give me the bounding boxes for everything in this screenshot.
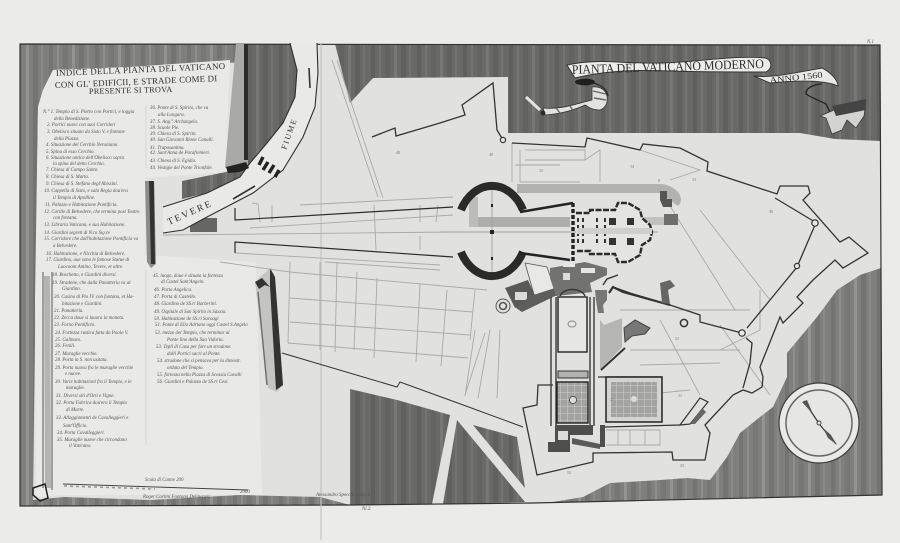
bridge piers (259, 157, 279, 177)
index list column 2 upper: 37. S. Ang.° Archangelo. (150, 120, 198, 125)
river Tiber (163, 43, 318, 233)
index paper (35, 60, 262, 497)
ribbon year (754, 68, 838, 86)
arrow mark (603, 275, 618, 285)
index list column 1: la spina del detto Cerchio. (53, 162, 105, 167)
index list column 1: il Vaticano. (69, 444, 91, 449)
south palace buildings (548, 398, 708, 452)
index list column 2 lower: 47. Porta di Castello. (154, 295, 196, 300)
index list column 2 upper: 43. Chiesa di S. Egidio. (150, 159, 196, 164)
index list column 1: 35. Muraglie nuove che circondano (57, 438, 127, 443)
index list column 2 lower: 45. luogo, doue è situata la fortezza (153, 274, 224, 279)
connecting wing (516, 283, 590, 312)
index list column 1: 13. Libraria Vaticana, e sua Habitazione. (44, 223, 125, 228)
index list column 1: 33. Alloggiamenti de Cavalleggieri e (56, 416, 129, 421)
plan reference numbers: 8 (658, 178, 660, 183)
corridors grey bands (469, 184, 681, 227)
St Peter's Basilica plan (573, 203, 652, 262)
plan reference numbers (396, 150, 773, 475)
scale bar: 2000 (240, 490, 250, 495)
index list column 2 upper: 36. Ponte di S. Spirito, che va (150, 106, 209, 111)
St Peter's ribbon title (526, 56, 866, 134)
index list column 2 upper: 41. Trapasantina. (150, 146, 185, 151)
index list column 1: 5. Spina di esso Cerchio. (46, 150, 95, 155)
ribbon tail left (526, 79, 608, 115)
plan reference numbers: 31 (675, 336, 679, 341)
index list column 1: 6. Situazione antica dell'Obelisco sopra (46, 156, 125, 161)
index list column 1: 12. Cortile di Belvedere, che termina post Teatro (44, 210, 140, 215)
hatched background: beside the river (182, 44, 297, 199)
Vatican palace buildings (505, 262, 675, 313)
signature: Alessandro Specchi sculpsit (315, 493, 371, 498)
ribbon tail right (806, 84, 866, 134)
index list column 1: della Benedizione. (54, 117, 90, 122)
index list column 1: 8. Chiesa di S. Marta. (46, 175, 89, 180)
index list column 1: 24. Fortezza rustica fatta da Paolo V. (55, 331, 129, 336)
north block (550, 262, 607, 296)
index list column 1: 23. Forno Pontificio. (54, 323, 95, 328)
index list column 2 upper: 39. Chiesa di S. Spirito. (150, 132, 197, 137)
index list column 1: 14. Giardini segreti di N.ro Sig.re (44, 231, 111, 236)
index title: INDICE DELLA PIANTA DEL VATICANO (56, 61, 226, 78)
index list column 1: Laocoont Antino, Tevere, et altre. (57, 265, 123, 270)
index list column 1: 34. Porta Cavalleggieri. (57, 431, 105, 436)
plan reference numbers: 35 (539, 168, 543, 173)
index list column 1: di Marte. (66, 408, 84, 413)
index list column 1: 18. Boschetto, e Giardini diversi. (52, 273, 117, 278)
index list column 1: 22. Zecca doue si lauora la moneta. (54, 316, 124, 321)
index list column 2 upper: 40. San Giovanni Rione Canalli. (150, 138, 214, 143)
index list column 1: 21. Panatteria. (54, 309, 83, 314)
current arrows (233, 68, 310, 199)
Castel ring (496, 299, 510, 313)
corner towers (500, 137, 818, 336)
plan reference numbers: 55 (680, 463, 684, 468)
west block (505, 280, 537, 308)
index column divider (145, 105, 147, 445)
index list column 1: 15. Corridore che dall'habitazione Pontificia va (44, 237, 139, 242)
triangular court (525, 263, 555, 298)
Belvedere court (551, 289, 594, 426)
index list column 2 upper (150, 106, 214, 171)
index list column 2 lower: 46. Porta Angelica. (154, 288, 192, 293)
index list column 2 lower: 51. Ponte di Elio Adriano oggi Castel S.Angelo (155, 323, 248, 328)
obelisk scroll lower (255, 268, 283, 392)
main ribbon (567, 57, 771, 78)
plan reference numbers: 49 (769, 209, 773, 214)
compass (779, 383, 859, 463)
index list column 1: e nuove. (65, 372, 81, 377)
index list column 2 lower: 52. mezzo del Tempio, che terminar al (155, 331, 230, 336)
outer bastions upper (282, 83, 868, 475)
index list column 1: 17. Giardino, oue sono le famose Statue di (46, 258, 130, 263)
index list column 1: il Tempio di Apolline. (53, 196, 95, 201)
plan reference numbers: 17 (610, 397, 615, 402)
plan reference numbers: 55 (567, 470, 571, 475)
index title: CON GL' EDIFICII, E STRADE COME DI (55, 73, 218, 90)
index list column 1: muraglie. (66, 386, 85, 391)
index list column 1: 27. Muraglie vecchie. (55, 352, 98, 357)
plan reference numbers: 31 (678, 393, 682, 398)
corridors of the square (520, 203, 573, 260)
index list column 1 (42, 110, 140, 449)
plan reference numbers: 34 (630, 164, 634, 169)
index left roll (33, 272, 52, 501)
ribbon year: ANNO 1560 (769, 70, 823, 85)
index list column 1: 29. Porta nuova fra le muraglie vecchie (55, 366, 134, 371)
index list column 1: 30. Varie habitazioni fra il Tempio, e le (55, 380, 132, 385)
page note top: N.1 (866, 40, 874, 45)
index list column 1: a Belvedere. (53, 244, 77, 249)
index list column 2 lower: 56. Giardini e Palazzo de SS.ri Cesi. (157, 380, 229, 385)
engraver credit: Roger Carlini Fontana Delineavit (142, 495, 210, 500)
index list column 1: con fontana. (53, 216, 77, 221)
index list column 1: 25. Galinaro. (55, 338, 81, 343)
index list column 1: 19. Stradone, che dalla Panatteria va al (52, 281, 131, 286)
index list column 2 lower: 53. Tepli di Casa per fare un stradone. (156, 345, 232, 350)
index list column 2 lower: ordata del Tempio. (167, 366, 204, 371)
index list column 1: 20. Casino di Pio IV. con fontana, et Ha- (54, 295, 134, 300)
index list column 1: bitazione e Giardini. (62, 302, 102, 307)
Belvedere garden south (598, 377, 662, 422)
index list column 1: 2. Portici nuovi con suoi Corridori (47, 123, 116, 128)
index list column 2 lower: Ponte lino della Sua Vidoria. (166, 338, 224, 343)
index list column 2 lower: dalli Portici sacri al Ponte. (167, 352, 221, 357)
left post (145, 181, 156, 268)
scale bar (63, 478, 250, 495)
index list column 1: 4. Situazione del Cerchio Neroniano. (46, 143, 118, 148)
page note bottom: Ni.2. (361, 507, 372, 512)
St Peter's Square colonnade (461, 186, 523, 276)
index list column 1: 3. Obelisco situato da Sisto V. e fontane (47, 130, 126, 135)
index list column 2 upper: 42. Sant'Anna de Parafrenieri. (150, 151, 210, 156)
page fold (320, 44, 322, 540)
index title: PRESENTE SI TROVA (89, 85, 173, 96)
index list column 2 lower: 49. Ospitale di San Spirito in Saxxia. (154, 310, 227, 315)
northern wall strip (609, 287, 670, 305)
garden of Pius IV (600, 318, 688, 370)
square axis and obelisk (440, 190, 658, 272)
index list column 2 lower: di Castel Sant'Angelo. (161, 280, 205, 285)
index list column 1: della Piazza. (54, 137, 79, 142)
index title (55, 61, 226, 96)
index list column 1: 7. Chiesa di Campo Santo. (46, 168, 98, 173)
index list column 2 lower: 50. Habitazione de SS.ri Savoagi (154, 317, 219, 322)
index list column 2 lower: 55. fortezza nella Piazza di Scossia Cavalli (157, 373, 242, 378)
index list column 1: 26. Fenili. (55, 344, 75, 349)
index list column 2 upper: alla Longara. (158, 113, 185, 118)
index list column 1: 10. Cappella di Sisto, e sala Regia dou'era (44, 189, 128, 194)
hatched background: bottom right (533, 268, 882, 503)
index list column 1: 28. Porta in S. non usitata. (55, 358, 108, 363)
ribbon title text: PIANTA DEL VATICANO MODERNO (572, 56, 764, 77)
index list column 1: 11. Palazzo e Habitazione Pontificia. (45, 203, 118, 208)
index list column 1: N.° 1. Tempio di S. Pietro con Portici, e loggia (42, 110, 135, 115)
plan reference numbers: 48 (396, 150, 400, 155)
index list column 1: Sant'Officio. (63, 424, 88, 429)
scale bar: Scala di Canne 200 (145, 478, 184, 483)
index list column 2 lower: 48. Giardino de SS.ri Barberini. (154, 302, 217, 307)
hatched background: left margin (20, 44, 350, 506)
index list column 1: 31. Diversi siti d'Orti e Vigne. (56, 394, 115, 399)
index list column 1: 9. Chiesa di S. Stefano degl'Abissini. (46, 182, 118, 187)
plan reference numbers: 48 (489, 152, 493, 157)
index list column 1: 32. Porta Fabrica dou'era il Tempio (56, 401, 128, 406)
long walls of the Borgo (235, 207, 453, 257)
river label: Tevere: TEVERE (166, 199, 214, 228)
index list column 1: Giardino. (62, 287, 81, 292)
hatched background: bottom centre blocks (190, 218, 525, 505)
river label: Fiume: FIUME (279, 117, 299, 151)
hatched background: top right (335, 44, 881, 141)
index list column 2 upper: 38. Scuole Pie. (150, 126, 179, 131)
index list column 2 lower: 54. stradone che si pensava per la dimostr. (157, 359, 241, 364)
index list column 1: 16. Habitazione, e Nicchia di Belvedere. (46, 252, 125, 257)
plan reference numbers: 33 (692, 177, 696, 182)
obelisk scroll upper (225, 44, 249, 173)
index list column 2 upper: 44. Vestigie del Ponte Trionfale. (150, 166, 213, 171)
street grid of the Borgo (163, 60, 770, 445)
index list column 2 lower (153, 274, 248, 385)
